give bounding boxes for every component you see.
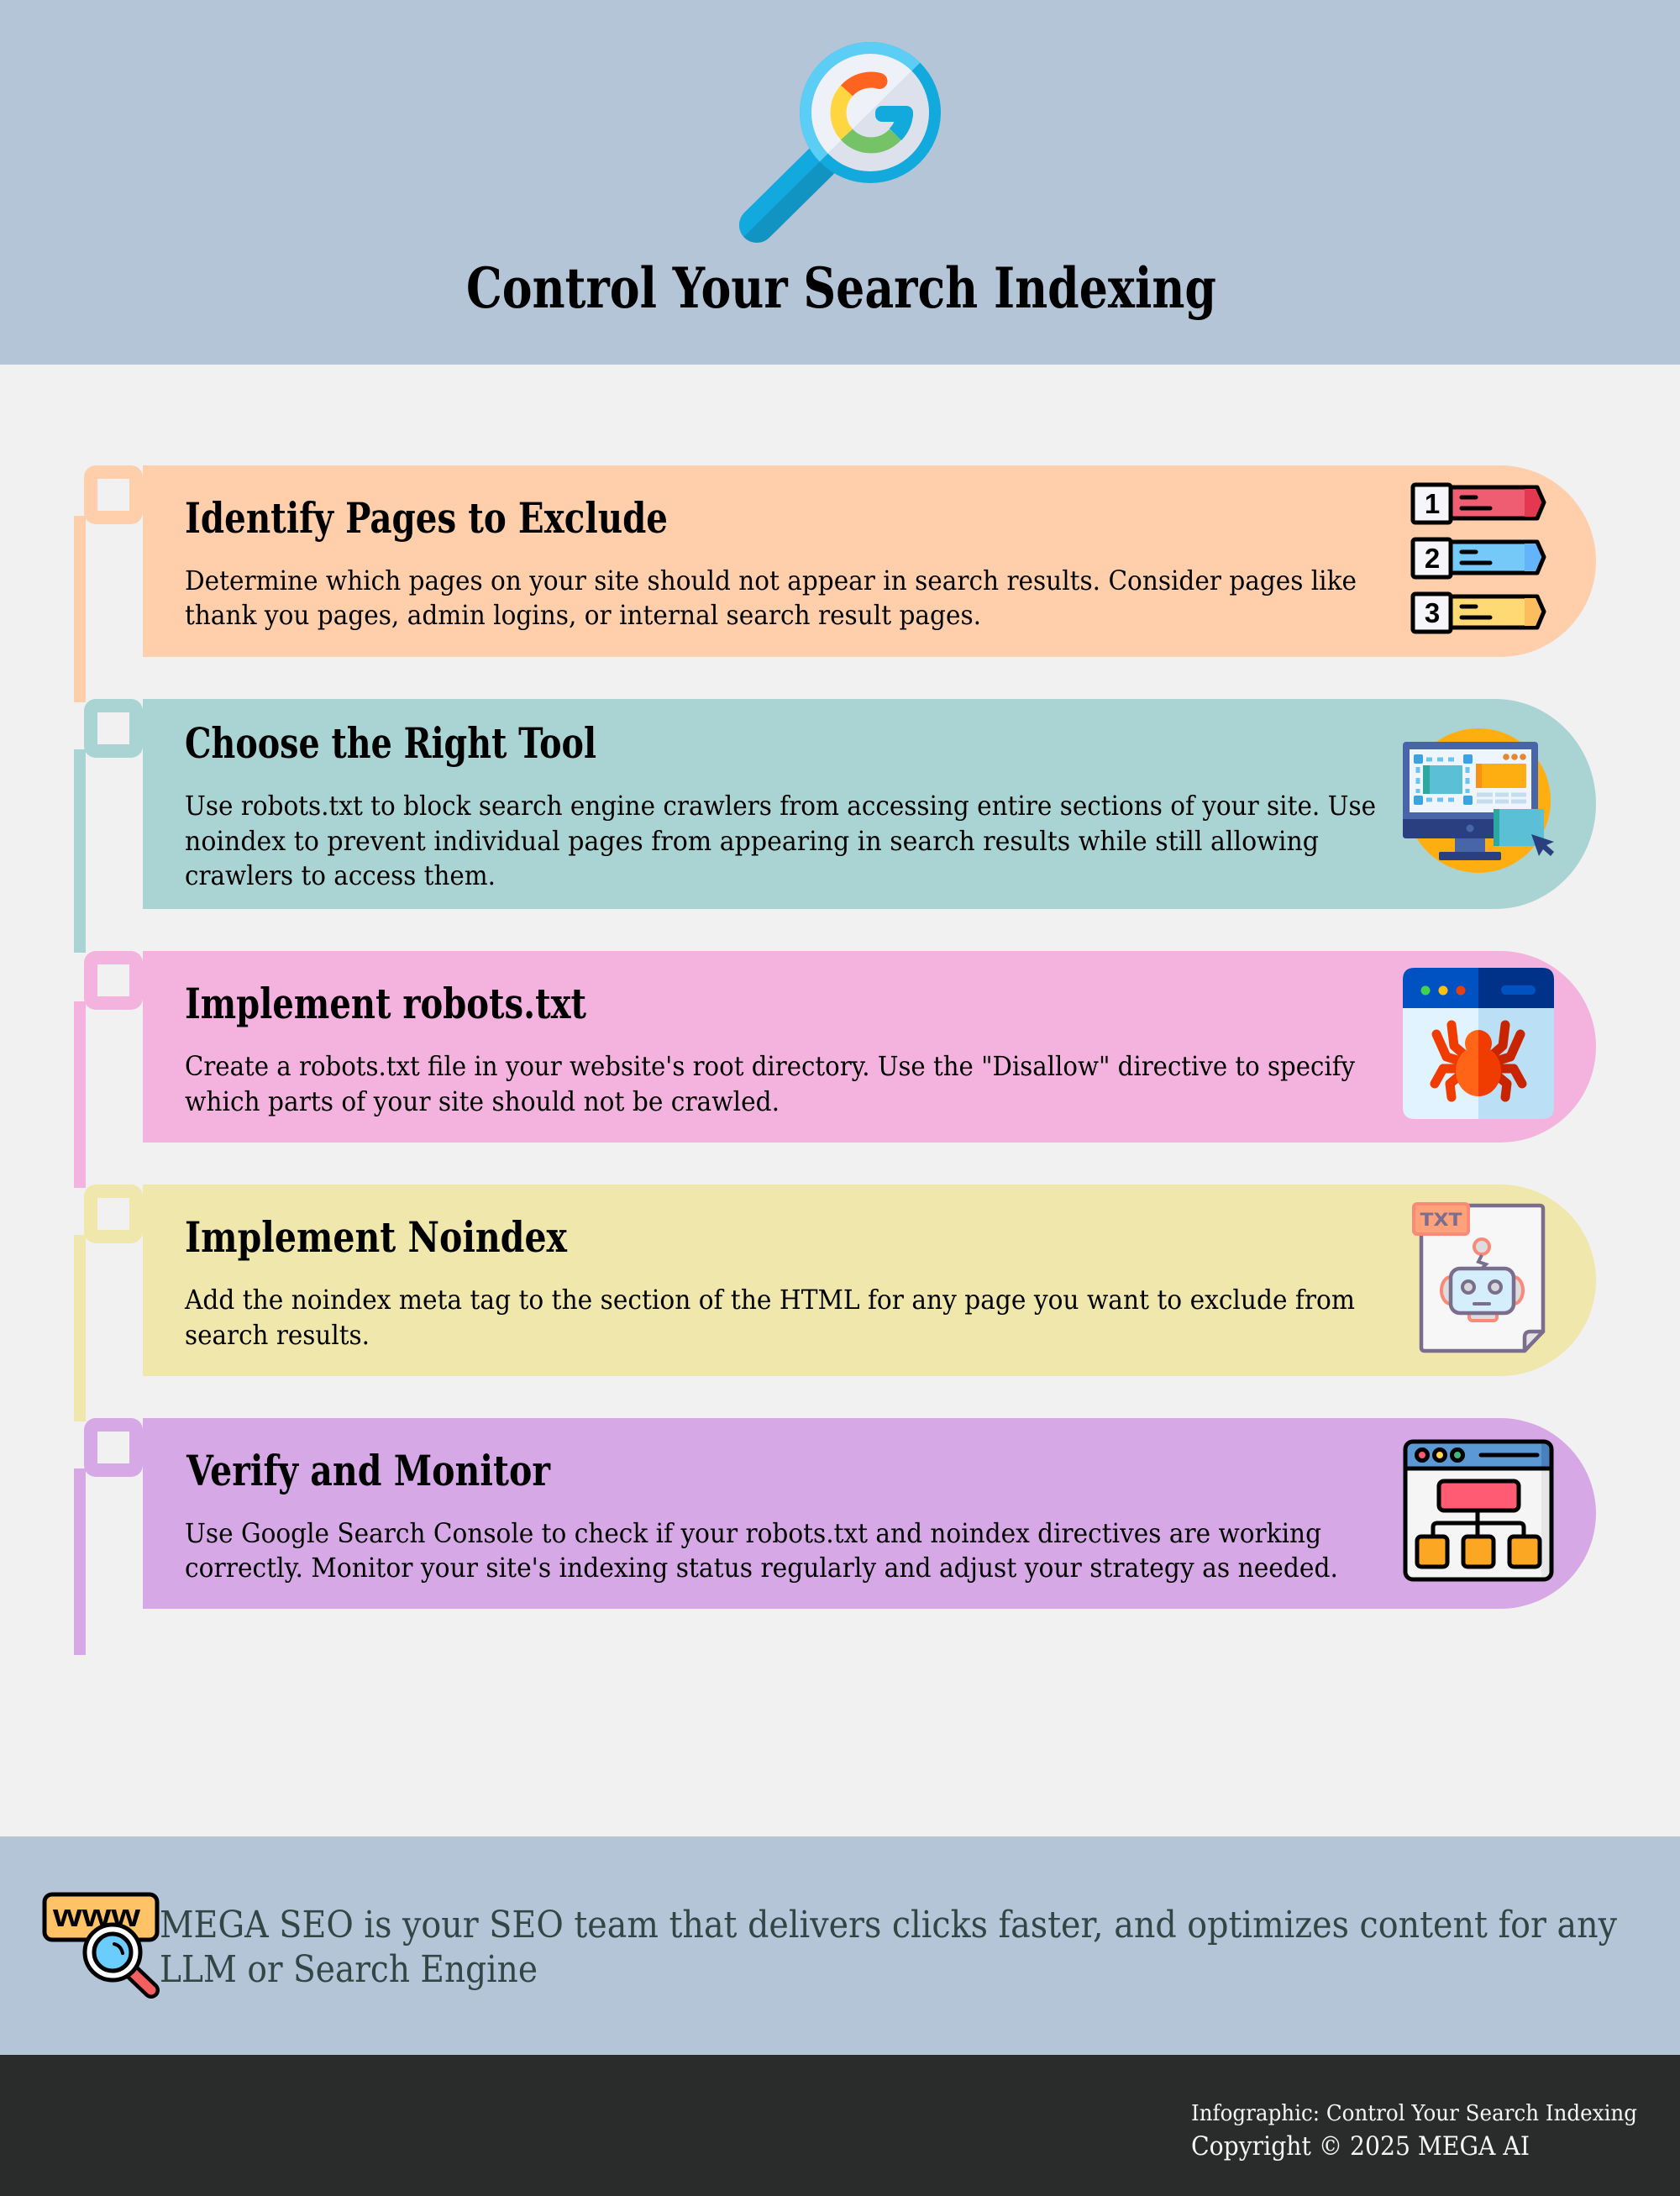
icon: www search	[45, 1894, 157, 1990]
header band	[0, 0, 1680, 365]
promo text	[160, 1904, 1617, 1991]
step 5 body: Use Google Search Console to check if your robots.txt and noindex directives are working	[185, 1517, 1321, 1549]
step 3 body: Create a robots.txt file in your website's root directory. Use the "Disallow" directive to specify	[185, 1050, 1355, 1082]
step 4 heading: Implement Noindex	[185, 1212, 568, 1262]
step 3: Implement robots.txt	[74, 951, 1596, 1188]
step 5 marker	[84, 1418, 143, 1477]
step 5: Verify and Monitor	[74, 1418, 1596, 1655]
icon: numbered list: 2	[1425, 543, 1440, 574]
footer	[0, 2055, 1680, 2196]
icon: numbered list	[1413, 485, 1544, 632]
step 2 marker	[84, 699, 143, 758]
step 3 marker	[84, 951, 143, 1010]
promo text: LLM or Search Engine	[160, 1948, 538, 1991]
step 3 body: which parts of your site should not be crawled.	[185, 1085, 780, 1117]
icon: Google magnifying glass	[757, 42, 941, 225]
icon: numbered list: 3	[1425, 597, 1440, 628]
icon: monitor with layout	[1403, 728, 1554, 873]
step 2 body	[185, 790, 1376, 891]
footer caption: Infographic: Control Your Search Indexing	[1191, 2101, 1637, 2126]
step 4 body: search results.	[185, 1319, 370, 1351]
step 4: Implement Noindex	[74, 1185, 1596, 1421]
step 5 body: correctly. Monitor your site's indexing status regularly and adjust your strategy as needed.	[185, 1552, 1338, 1584]
step 4 body	[184, 1284, 1355, 1351]
step 2 body: crawlers to access them.	[185, 859, 496, 891]
icon: numbered list: 1	[1425, 488, 1440, 519]
step 2: Choose the Right Tool	[74, 699, 1596, 953]
step 1 body	[185, 565, 1357, 631]
step 4 body: Add the noindex meta tag to the section of the HTML for any page you want to exclude from	[184, 1284, 1355, 1316]
step 2 body: Use robots.txt to block search engine crawlers from accessing entire sections of your site. Use	[185, 790, 1376, 822]
step 5 heading: Verify and Monitor	[186, 1446, 551, 1495]
step 1 marker	[84, 465, 143, 524]
step 4 marker	[84, 1185, 143, 1243]
step 2 heading: Choose the Right Tool	[185, 718, 596, 768]
icon: www search: www	[52, 1899, 141, 1934]
step 1 body: thank you pages, admin logins, or internal search result pages.	[185, 599, 981, 631]
step 3 heading: Implement robots.txt	[185, 979, 586, 1028]
title: Control Your Search Indexing	[466, 255, 1216, 321]
copyright: Copyright © 2025 MEGA AI	[1191, 2131, 1530, 2162]
step 1 heading: Identify Pages to Exclude	[185, 493, 668, 543]
icon: browser with spider	[1403, 968, 1554, 1119]
icon: robots text file	[1414, 1204, 1543, 1351]
promo band	[0, 1836, 1680, 2055]
step 5 body	[185, 1517, 1338, 1584]
step 2 body: noindex to prevent individual pages from appearing in search results while still allowing	[185, 825, 1319, 857]
icon: site map window	[1405, 1442, 1551, 1579]
icon: robots text file: TXT	[1420, 1210, 1462, 1230]
step 1: Identify Pages to Exclude	[74, 465, 1596, 702]
step 3 body	[185, 1050, 1355, 1117]
step 1 body: Determine which pages on your site should not appear in search results. Consider pages like	[185, 565, 1357, 596]
